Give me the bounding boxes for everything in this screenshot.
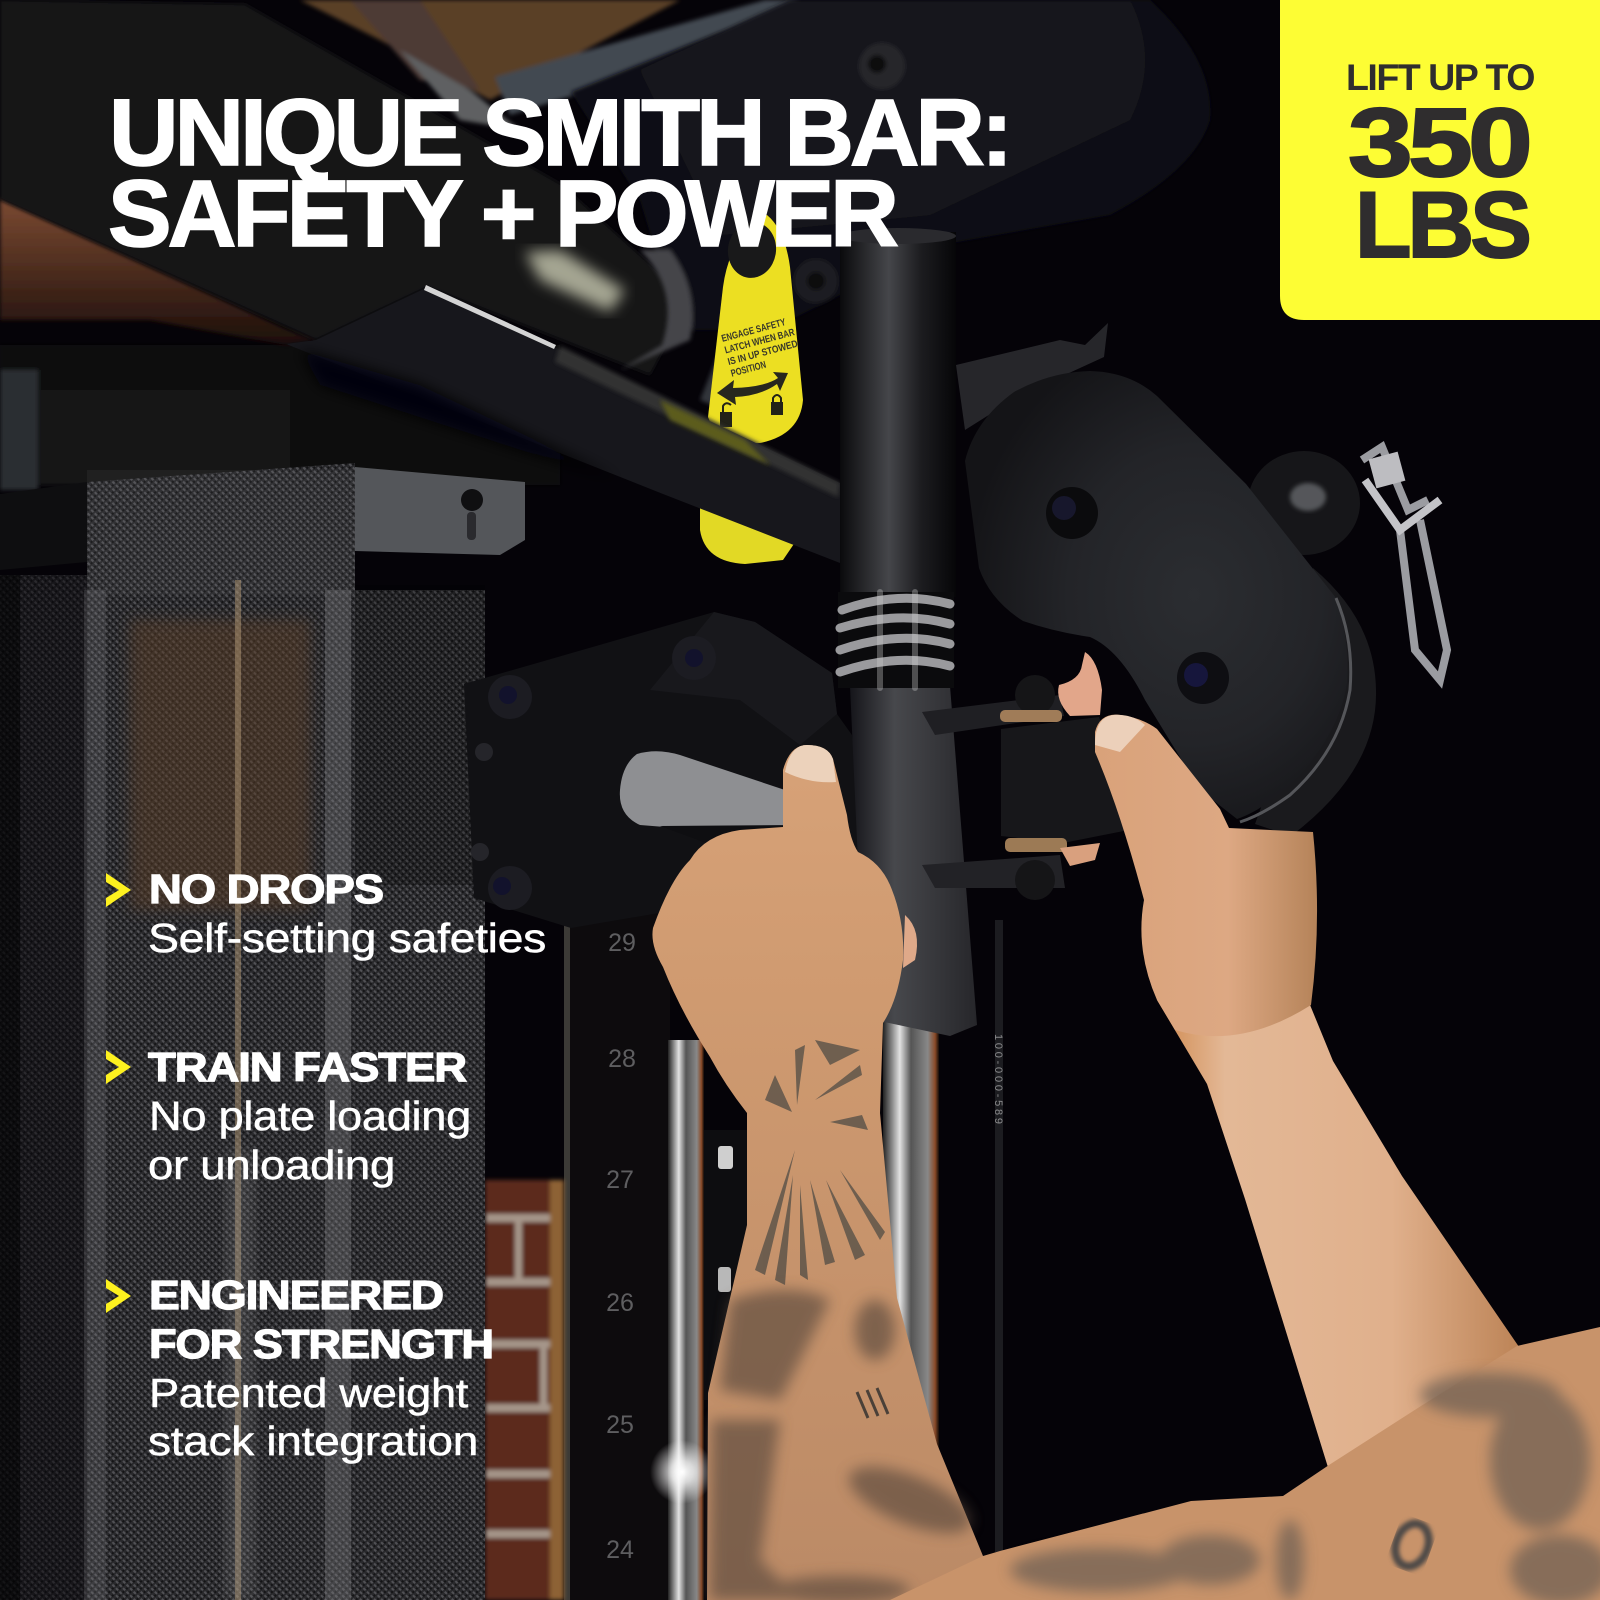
headline bbox=[108, 80, 1009, 267]
chevron bbox=[106, 1050, 131, 1084]
chrome guide rods bbox=[650, 1020, 939, 1600]
bar shine patch bbox=[525, 250, 625, 312]
tag text: POSITION bbox=[730, 360, 767, 380]
weight numbers: 27 bbox=[606, 1166, 634, 1194]
chevron bbox=[106, 1279, 131, 1313]
tag text: LATCH WHEN BAR bbox=[724, 327, 797, 356]
brown ceiling beam bbox=[0, 199, 316, 345]
cable: 100-000-589 bbox=[992, 1034, 1004, 1124]
bullet: no drops bbox=[106, 866, 546, 961]
yellow weight badge bbox=[1280, 0, 1600, 320]
left band and bracket bbox=[0, 467, 525, 570]
weight numbers: 24 bbox=[606, 1536, 634, 1564]
weight numbers: 25 bbox=[606, 1411, 634, 1439]
weight numbers: 26 bbox=[606, 1289, 634, 1317]
weight numbers: 28 bbox=[608, 1045, 636, 1073]
headline: SAFETY + POWER bbox=[108, 161, 897, 267]
roman numeral tattoo bbox=[857, 1388, 888, 1418]
left arm and hand bbox=[652, 745, 987, 1600]
right arm and hand bbox=[1095, 715, 1535, 1490]
shoulder with tattoos bbox=[890, 1327, 1600, 1600]
bullet: train faster: No plate loading bbox=[149, 1093, 471, 1139]
grey release handle bbox=[620, 751, 800, 829]
tag text bbox=[720, 315, 803, 380]
badge text: LIFT UP TO bbox=[1346, 57, 1535, 98]
bullet: train faster: TRAIN FASTER bbox=[148, 1044, 466, 1090]
mesh safety panel bbox=[0, 463, 485, 1600]
forearm tattoos bbox=[755, 1040, 885, 1285]
bullet: engineered for strength: FOR STRENGTH bbox=[149, 1321, 493, 1367]
upper curved cover bbox=[571, 0, 1210, 405]
right bracket behind cover bbox=[956, 323, 1108, 430]
lower yellow latch bbox=[700, 507, 800, 564]
weight numbers: 29 bbox=[608, 929, 636, 957]
carabiner hook bbox=[1362, 447, 1447, 680]
chrome spring bbox=[838, 592, 954, 688]
bullet: engineered for strength bbox=[106, 1272, 493, 1464]
ball stopper bbox=[1248, 451, 1360, 555]
main column bbox=[840, 228, 977, 1036]
weight numbers bbox=[606, 929, 636, 1564]
bullet: engineered for strength: stack integration bbox=[148, 1418, 478, 1464]
badge text: 350 bbox=[1348, 88, 1528, 197]
yellow safety tag bbox=[708, 215, 803, 443]
tag text: IS IN UP STOWED bbox=[727, 339, 799, 368]
tag arrow bbox=[717, 372, 788, 405]
smith bar bbox=[286, 285, 840, 563]
bullet: train faster bbox=[106, 1044, 471, 1188]
pulley cover bbox=[965, 371, 1376, 836]
badge text: LBS bbox=[1355, 172, 1529, 277]
cable bbox=[992, 920, 1004, 1552]
hinge arms bbox=[922, 675, 1139, 900]
headline: UNIQUE SMITH BAR: bbox=[109, 80, 1009, 186]
tag lock icons bbox=[720, 395, 783, 427]
bullet: train faster: or unloading bbox=[148, 1142, 395, 1188]
left side plate bbox=[464, 612, 870, 928]
bullet: no drops: Self-setting safeties bbox=[148, 915, 546, 961]
bullet: engineered for strength: ENGINEERED bbox=[149, 1272, 443, 1318]
top-left frame beam bbox=[0, 0, 690, 375]
bullet: no drops: NO DROPS bbox=[149, 866, 383, 912]
brick wall lower bbox=[485, 1180, 564, 1600]
chevron bbox=[106, 873, 131, 907]
tag text: ENGAGE SAFETY bbox=[720, 317, 787, 345]
badge text bbox=[1346, 57, 1535, 277]
background: brick wall and ceiling bbox=[0, 0, 800, 490]
fingers behind cover bbox=[1058, 652, 1102, 866]
weight stack bbox=[564, 900, 670, 1600]
bullet: engineered for strength: Patented weight bbox=[149, 1370, 469, 1416]
